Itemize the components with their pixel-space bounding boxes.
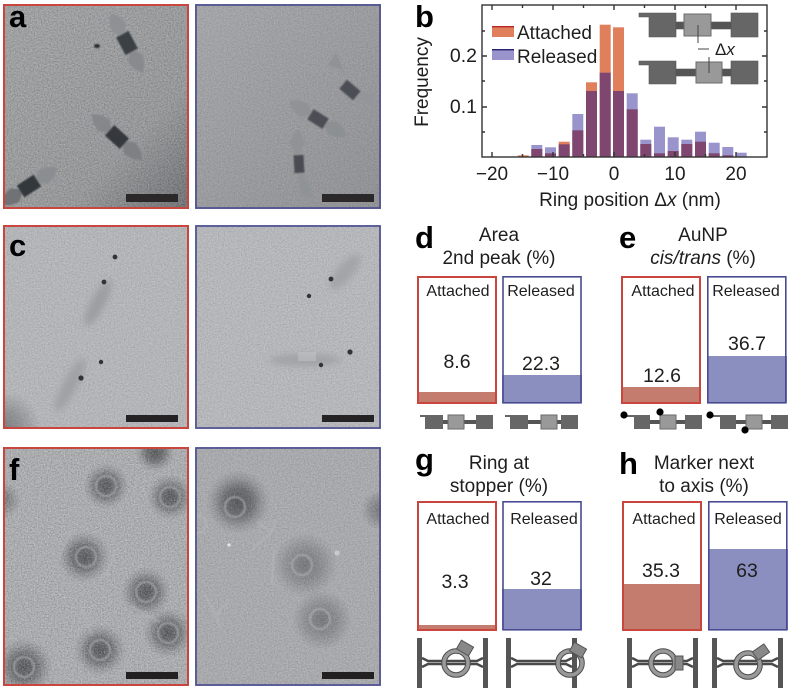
panel b: histogram	[412, 0, 767, 211]
bar attached 35.3: Attached	[632, 511, 696, 528]
legend: Attached	[517, 23, 592, 44]
y axis title: Frequency	[412, 37, 433, 127]
panel g: ring at stopper	[415, 442, 587, 688]
panel letter e: e	[619, 220, 636, 255]
heading g: Ring at	[469, 453, 529, 474]
bar released 63: 63	[736, 560, 758, 582]
heading h: to axis (%)	[659, 476, 749, 497]
panel a: attached micrograph	[0, 4, 189, 211]
panel letter d: d	[415, 220, 434, 255]
heading g: stopper (%)	[450, 476, 548, 497]
bar attached 8.6	[417, 277, 497, 403]
heading d: 2nd peak (%)	[442, 248, 556, 269]
legend	[492, 23, 597, 68]
bar attached 12.6: 12.6	[643, 365, 681, 387]
heading e: cis/trans (%)	[650, 248, 756, 269]
icon: ring at stopper	[506, 638, 587, 688]
frame a attached	[4, 5, 188, 208]
bar released 63	[708, 502, 788, 630]
panel h: marker next to axis	[619, 446, 788, 688]
bar attached 3.3: Attached	[426, 511, 490, 528]
icon: marker beside axis	[627, 638, 698, 688]
scale bar a released	[322, 194, 374, 202]
inset: ring position schematic: Δx	[715, 40, 735, 59]
icon: attached shuttle	[420, 415, 493, 429]
x axis tick labels: −20	[476, 164, 508, 185]
frame f released	[196, 448, 380, 685]
histogram bars	[518, 25, 747, 157]
heading e: AuNP	[678, 225, 728, 246]
icon: marker away from axis	[712, 638, 783, 688]
bar released 22.3: 22.3	[522, 353, 560, 375]
heading h: Marker next	[654, 453, 754, 474]
bar attached 35.3	[622, 502, 702, 630]
x axis tick labels	[476, 164, 747, 185]
panel d: area of 2nd peak	[415, 220, 582, 429]
bar released 36.7: 36.7	[728, 333, 766, 355]
icon: released shuttle	[505, 415, 578, 429]
scale bar f released	[322, 672, 374, 679]
bar released 32: Released	[510, 511, 578, 528]
inset: ring position schematic	[639, 13, 758, 84]
bar attached 8.6: Attached	[426, 283, 490, 300]
panel e: AuNP cis/trans	[619, 220, 788, 434]
legend: Released	[517, 47, 597, 68]
scale bar a	[126, 194, 178, 202]
bar released 32: 32	[530, 568, 552, 590]
bar released 22.3	[502, 277, 582, 403]
x axis title: Ring position Δx (nm)	[539, 190, 721, 211]
frame c attached	[4, 226, 188, 428]
icon: ring mid-axis	[417, 638, 488, 688]
bar attached 12.6: Attached	[631, 283, 695, 300]
panel letter a: a	[9, 0, 27, 34]
panel letter c: c	[9, 228, 26, 263]
icon: trans AuNP	[706, 411, 788, 434]
panel a: released micrograph	[195, 4, 381, 209]
frame a released	[196, 5, 380, 208]
scale bar c released	[322, 415, 374, 422]
x axis tick labels: −10	[537, 164, 569, 185]
panel letter h: h	[619, 446, 638, 481]
panel letter g: g	[415, 442, 434, 477]
x axis tick labels: 10	[664, 164, 686, 185]
bar released 22.3: Released	[507, 283, 575, 300]
bar attached 3.3: 3.3	[441, 571, 469, 593]
scale bar f	[126, 672, 178, 679]
frame c released	[196, 226, 380, 428]
x axis tick labels: 20	[725, 164, 747, 185]
panel c: released micrograph	[195, 225, 381, 429]
panel c: attached micrograph	[5, 227, 187, 427]
bar attached 3.3	[417, 502, 497, 630]
y axis tick labels: 0.1	[450, 96, 477, 118]
panel f: attached micrograph	[5, 449, 187, 684]
bar attached 12.6	[621, 277, 701, 403]
bar released 36.7	[707, 277, 787, 403]
bar attached 35.3: 35.3	[642, 560, 680, 582]
bar released 63: Released	[714, 511, 782, 528]
bar attached 8.6: 8.6	[443, 351, 471, 373]
bar released 36.7: Released	[712, 283, 780, 300]
x axis tick labels: 0	[609, 164, 619, 185]
panel letter b: b	[415, 0, 434, 34]
panel letter f: f	[9, 452, 20, 487]
panel f: released micrograph	[195, 447, 381, 686]
axes frame and ticks	[482, 5, 767, 157]
icon: cis AuNP	[620, 408, 702, 429]
bar released 32	[502, 502, 582, 630]
y axis tick labels	[450, 45, 477, 118]
heading d: Area	[479, 225, 519, 246]
frame f attached	[4, 448, 188, 685]
y axis tick labels: 0.2	[450, 45, 477, 67]
scale bar c	[126, 415, 178, 422]
